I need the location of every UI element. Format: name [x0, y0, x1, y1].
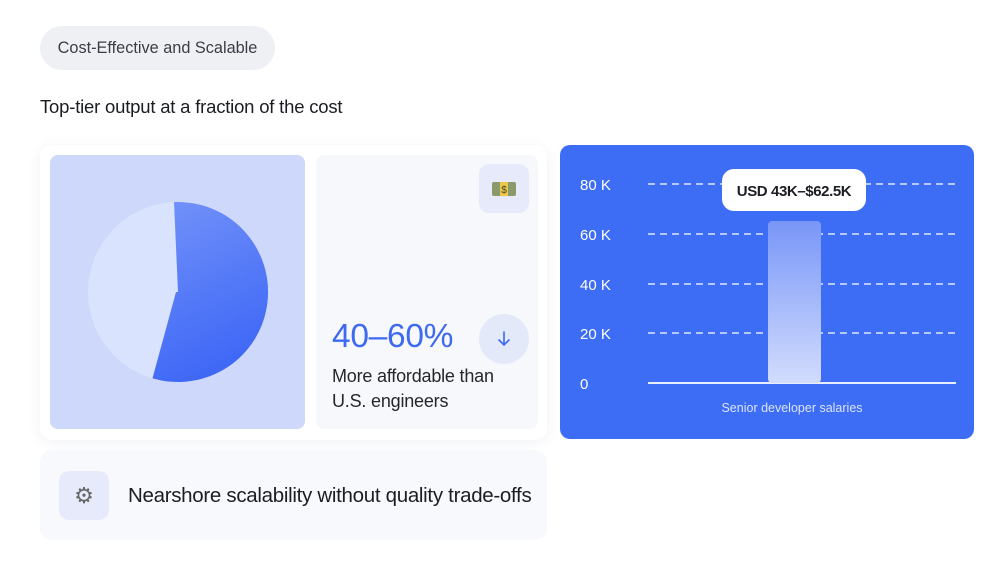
y axis labels	[580, 177, 611, 393]
stat label	[332, 366, 494, 411]
y axis labels: 20 K	[580, 326, 611, 343]
y axis labels: 60 K	[580, 227, 611, 244]
icon: money	[479, 164, 529, 213]
stat label: U.S. engineers	[332, 391, 448, 411]
icon: money: $	[501, 184, 507, 196]
scalability text: Nearshore scalability without quality trade-offs	[128, 484, 531, 507]
tag pill	[40, 26, 275, 70]
y axis labels: 40 K	[580, 277, 611, 294]
stat value: 40–60%	[332, 318, 453, 355]
icon: gear	[59, 471, 109, 520]
icon: gear: ⚙	[74, 482, 94, 508]
panel: stat	[316, 155, 538, 429]
stat label: More affordable than	[332, 366, 494, 386]
y axis labels: 0	[580, 376, 588, 393]
tag pill: Cost-Effective and Scalable	[58, 38, 257, 56]
card: scalability	[40, 450, 547, 540]
x axis caption: Senior developer salaries	[721, 401, 863, 415]
bar	[768, 221, 821, 383]
y axis labels: 80 K	[580, 177, 611, 194]
subtitle: Top-tier output at a fraction of the cost	[40, 96, 342, 117]
icon: down arrow	[479, 314, 529, 364]
tooltip: USD 43K–$62.5K	[737, 183, 852, 200]
tooltip	[722, 169, 866, 211]
card: pie and stat	[40, 145, 547, 440]
panel: salary bar chart	[560, 145, 974, 439]
panel: pie chart	[50, 155, 305, 429]
